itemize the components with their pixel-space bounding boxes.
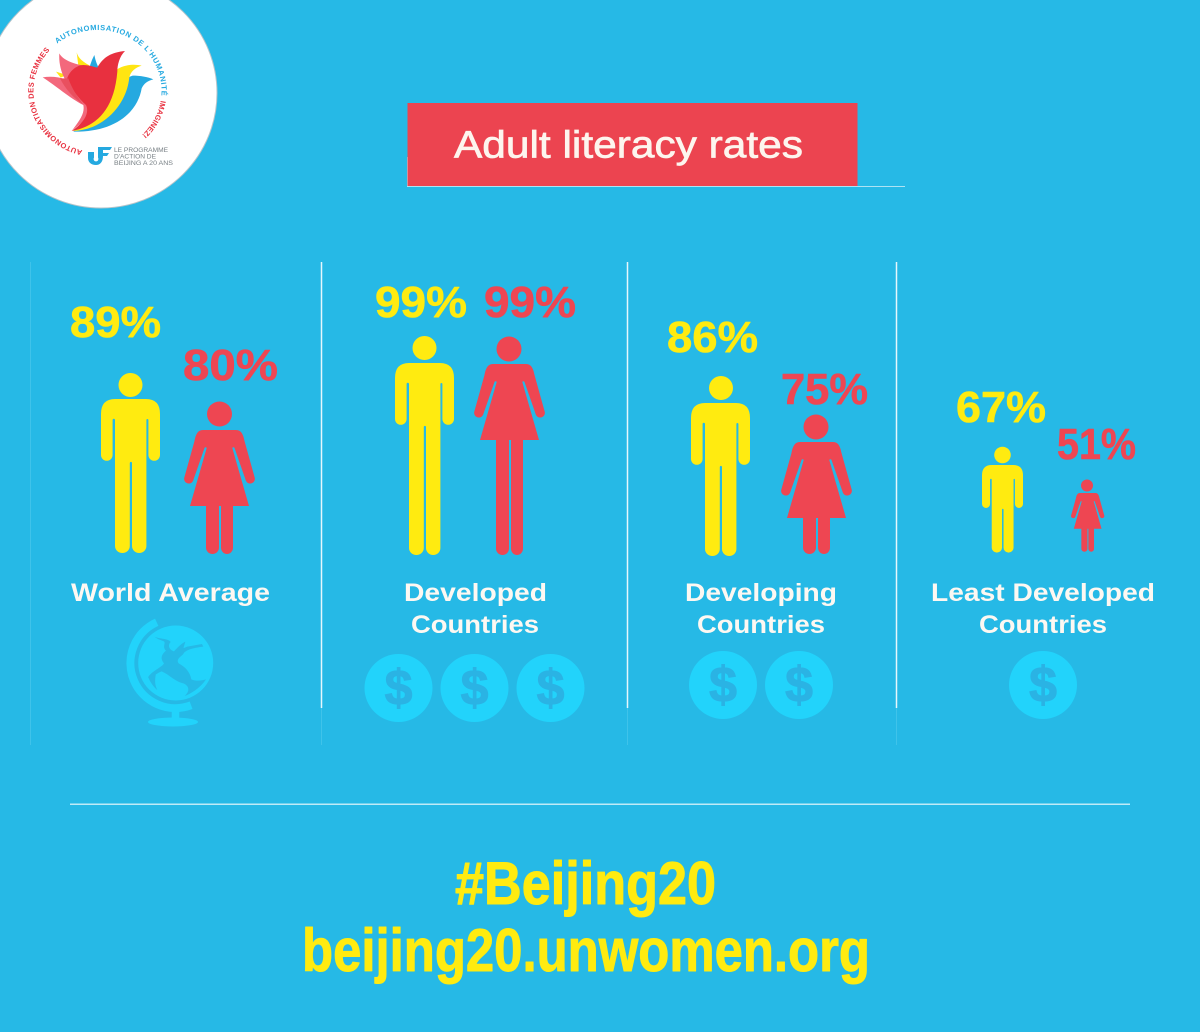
icon: two dollar coins: $: [709, 657, 737, 713]
circular slogan: AUTONOMISATION DES FEMMES: [28, 48, 82, 155]
icon: Beijing+20 emblem: [88, 147, 112, 165]
panel: Least Developed Countries: [931, 383, 1155, 719]
icon: two dollar coins: [689, 651, 833, 719]
label: Countries: [697, 611, 825, 639]
women 51%: 51%: [1057, 420, 1136, 469]
icon: globe: [130, 622, 213, 726]
icon: two dollar coins: $: [785, 657, 813, 713]
icon: man: [395, 336, 454, 555]
footer: hashtag and website: beijing20.unwomen.org: [302, 917, 870, 984]
title banner: [408, 103, 905, 186]
icon: one dollar coin: $: [1029, 657, 1057, 713]
circular slogan: AUTONOMISATION DE L'HUMANITÉ: [56, 24, 168, 96]
icon: three dollar coins: $: [461, 660, 489, 716]
icon: three dollar coins: [364, 654, 584, 722]
label: [685, 579, 837, 639]
label: [404, 579, 547, 639]
label: Least Developed: [931, 579, 1155, 607]
icon: woman: [781, 414, 852, 554]
men 89%: 89%: [70, 298, 161, 347]
circular slogan: IMAGINEZ!: [142, 101, 166, 138]
label: World Average: [71, 579, 270, 607]
column dividers: [30, 262, 896, 745]
men 67%: 67%: [956, 383, 1046, 432]
programme text: D'ACTION DE: [114, 154, 157, 160]
label: Developed: [404, 579, 547, 607]
panel: Developed Countries: [364, 278, 584, 722]
women 75%: 75%: [781, 365, 868, 414]
women 80%: 80%: [183, 341, 278, 390]
icon: one dollar coin: [1009, 651, 1077, 719]
label: Countries: [411, 611, 539, 639]
men 99%: 99%: [375, 278, 467, 327]
icon: man: [982, 447, 1023, 553]
icon: woman: [474, 336, 545, 555]
icon: three dollar coins: $: [385, 660, 413, 716]
footer: hashtag and website: #Beijing20: [455, 850, 716, 917]
icon: man: [691, 376, 750, 556]
programme text: BEIJING A 20 ANS: [114, 160, 174, 167]
icon: man: [101, 373, 160, 553]
label: Developing: [685, 579, 837, 607]
icon: doves: [43, 51, 153, 132]
circular slogan: [28, 24, 168, 155]
label: Countries: [979, 611, 1107, 639]
programme text: [114, 147, 174, 167]
logo badge: [0, 0, 218, 208]
men 86%: 86%: [667, 313, 758, 362]
programme text: LE PROGRAMME: [114, 147, 169, 154]
footer: hashtag and website: [302, 850, 870, 984]
panel: Developing Countries: [667, 313, 868, 719]
icon: three dollar coins: $: [537, 660, 565, 716]
icon: woman: [1071, 480, 1104, 552]
title text: Adult literacy rates: [454, 124, 803, 166]
icon: woman: [184, 402, 255, 554]
women 99%: 99%: [484, 278, 576, 327]
label: [931, 579, 1155, 639]
panel: World Average: [70, 298, 278, 726]
